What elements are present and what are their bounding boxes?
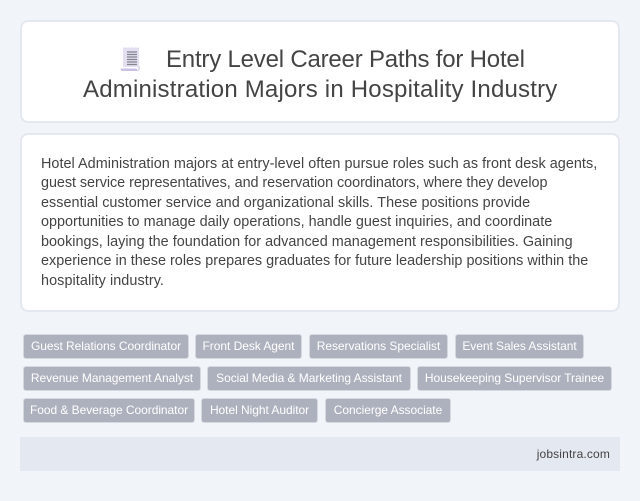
tag <box>201 398 318 423</box>
tag: Hotel Night Auditor <box>210 403 309 417</box>
description text: bookings, laying the foundation for advanced management responsibilities. Gaining <box>41 234 573 250</box>
tag: Revenue Management Analyst <box>31 371 193 385</box>
description text: hospitality industry. <box>41 273 164 289</box>
description text: essential customer service and organizational skills. These positions provide <box>41 195 530 211</box>
title: Administration Majors in Hospitality Industry <box>83 76 558 103</box>
footer bar <box>20 437 620 471</box>
tag <box>455 334 584 359</box>
tag: Event Sales Assistant <box>462 339 577 353</box>
title <box>83 46 558 103</box>
tag: Front Desk Agent <box>203 339 294 353</box>
title: Entry Level Career Paths for Hotel <box>166 46 525 73</box>
tag <box>417 366 612 391</box>
tag: Food & Beverage Coordinator <box>30 403 188 417</box>
tag <box>309 334 448 359</box>
tag: Social Media & Marketing Assistant <box>216 371 402 385</box>
tag <box>23 334 189 359</box>
tag <box>207 366 411 391</box>
description text: guest service representatives, and reservation coordinators, where they develop <box>41 175 547 191</box>
tag: Guest Relations Coordinator <box>31 339 181 353</box>
icon: document scroll <box>120 47 140 71</box>
panel: description card <box>20 133 620 312</box>
description text: Hotel Administration majors at entry-level often pursue roles such as front desk agents, <box>41 156 597 172</box>
tag <box>195 334 302 359</box>
tag: Concierge Associate <box>334 403 442 417</box>
tag <box>23 398 195 423</box>
tag list <box>23 334 612 423</box>
description text <box>41 156 597 289</box>
footer source: jobsintra.com <box>537 447 610 461</box>
tag: Housekeeping Supervisor Trainee <box>425 371 604 385</box>
panel: title card <box>20 20 620 123</box>
description text: opportunities to manage daily operations, handle guest inquiries, and coordinate <box>41 214 552 230</box>
tag: Reservations Specialist <box>317 339 440 353</box>
tag <box>23 366 201 391</box>
tag <box>325 398 451 423</box>
description text: experience in these roles prepares graduates for future leadership positions within the <box>41 253 588 269</box>
